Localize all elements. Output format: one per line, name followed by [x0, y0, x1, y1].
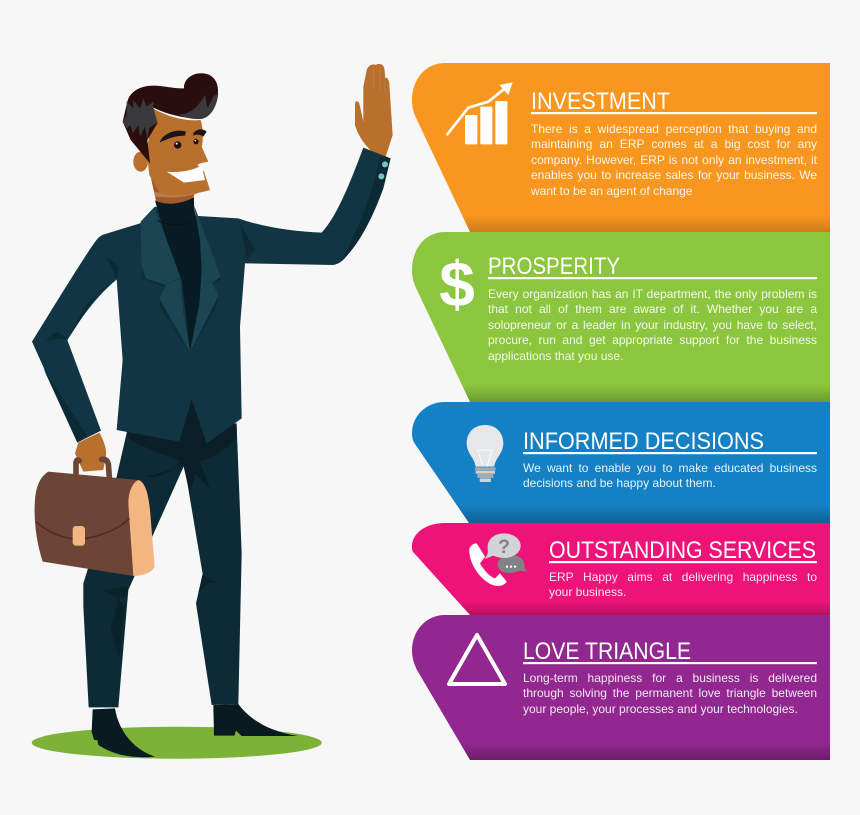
text: informed decisions: decisions and be happy about them.	[523, 476, 716, 490]
text: prosperity: procure, run and get appropriate support for the business	[488, 333, 817, 347]
lapels	[141, 205, 221, 352]
eyebrows and eyes	[160, 129, 207, 142]
text: investment	[531, 122, 817, 202]
neck	[151, 177, 200, 204]
text: prosperity: that not all of them are aware of it. Whether you are a	[488, 302, 817, 316]
icon: phone and speech bubbles: ?	[498, 537, 510, 558]
face	[147, 108, 210, 195]
text: love triangle	[523, 671, 817, 721]
text: outstanding services	[549, 570, 817, 605]
text: outstanding services: your business.	[549, 585, 626, 599]
hair	[123, 73, 218, 163]
heading: prosperity: PROSPERITY	[488, 253, 620, 280]
text: love triangle: through solving the permanent love triangle between	[523, 686, 817, 700]
hand holding handle	[75, 433, 106, 472]
text: love triangle: your people, your processes and your technologies.	[523, 702, 798, 716]
jacket shadows	[43, 157, 391, 443]
panel: investment	[412, 63, 830, 232]
lower body and briefcase	[35, 423, 298, 757]
collar and lapels	[141, 197, 221, 352]
briefcase side	[128, 480, 155, 576]
text: investment: want to be an agent of change	[531, 184, 692, 198]
panel: informed decisions	[412, 402, 830, 523]
trousers	[83, 427, 242, 707]
text: investment: There is a widespread perception that buying and	[531, 122, 817, 136]
upper body	[32, 148, 391, 447]
heading: outstanding services: OUTSTANDING SERVICES	[549, 537, 816, 564]
icon: light bulb	[467, 425, 503, 482]
heading: informed decisions: INFORMED DECISIONS	[523, 428, 764, 455]
text: outstanding services: ERP Happy aims at delivering happiness to	[549, 570, 817, 584]
text: informed decisions: We want to enable you to make educated business	[523, 461, 817, 475]
text: love triangle: Long-term happiness for a business is delivered	[523, 671, 817, 685]
illustration: businessman with briefcase	[32, 64, 393, 759]
text: prosperity: solopreneur or a leader in your industry, you have to select,	[488, 318, 817, 332]
text: investment: company. However, ERP is not only an investment, it	[531, 153, 817, 167]
raised hand	[355, 64, 393, 157]
head	[123, 73, 218, 204]
panel: outstanding services	[412, 523, 830, 615]
icon: phone and speech bubbles	[469, 533, 527, 586]
text: prosperity	[488, 287, 817, 367]
icon: dollar sign: $	[439, 248, 475, 320]
icon: triangle	[449, 635, 505, 684]
turtleneck	[155, 197, 202, 351]
text: investment: maintaining an ERP comes at a big cost for any	[531, 137, 817, 151]
jacket vent	[177, 397, 210, 447]
text: prosperity: applications that you use.	[488, 349, 623, 363]
smile	[167, 166, 205, 183]
text: prosperity: Every organization has an IT department, the only problem is	[488, 287, 817, 301]
heading: love triangle: LOVE TRIANGLE	[523, 638, 691, 665]
shoes	[92, 708, 155, 757]
text: informed decisions	[523, 461, 817, 496]
ear	[133, 152, 148, 172]
icon: rising bar chart	[447, 82, 513, 144]
briefcase handle	[76, 459, 109, 477]
briefcase front	[35, 472, 138, 576]
heading: investment: INVESTMENT	[531, 88, 670, 115]
ground ellipse	[32, 727, 322, 759]
panel: prosperity	[412, 232, 830, 402]
jacket	[32, 148, 391, 443]
cuff buttons	[378, 161, 388, 179]
text: investment: enables you to increase sales for your business. We	[531, 168, 817, 182]
panel: love triangle	[412, 615, 830, 760]
